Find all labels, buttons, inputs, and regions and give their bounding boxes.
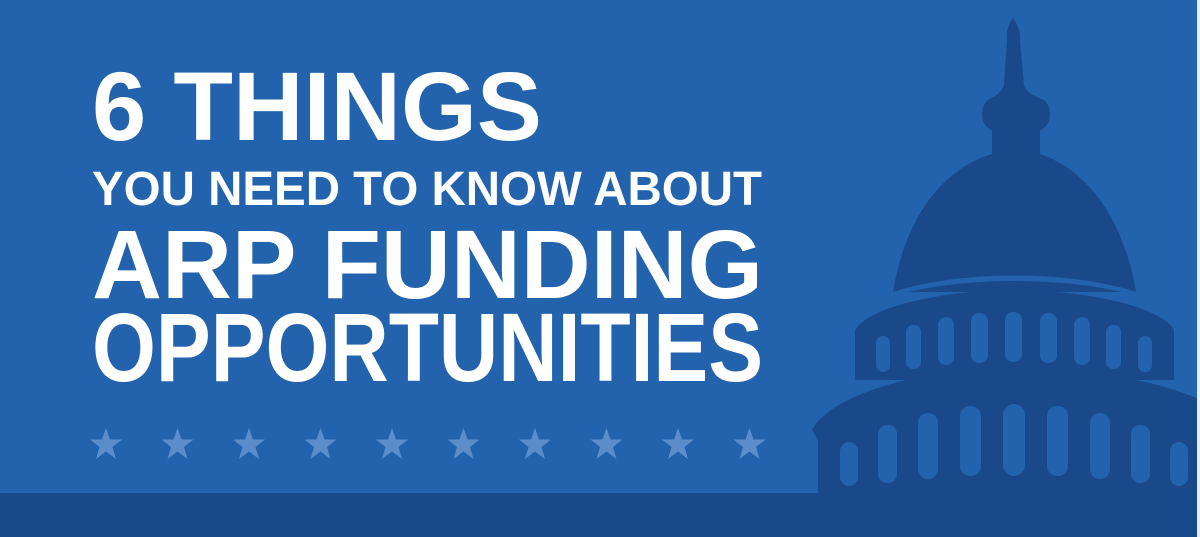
title: ARP FUNDING	[92, 210, 763, 319]
title: 6 THINGS	[92, 52, 542, 161]
title: OPPORTUNITIES	[92, 293, 763, 402]
icon: capitol dome silhouette	[812, 18, 1200, 500]
bottom band	[0, 493, 1200, 537]
stars row	[90, 428, 766, 459]
title	[92, 52, 763, 402]
title: YOU NEED TO KNOW ABOUT	[92, 163, 762, 216]
